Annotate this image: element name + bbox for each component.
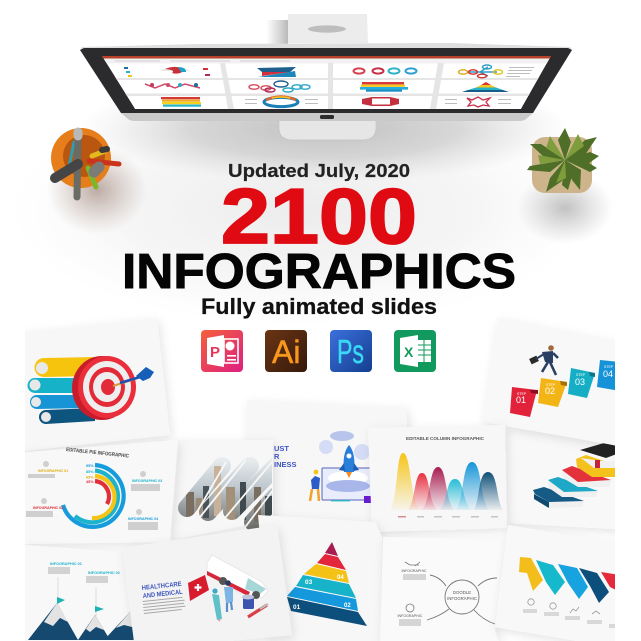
percent labels: 85% <box>86 470 94 474</box>
icon: excel: X <box>404 344 414 360</box>
percent labels: 95% <box>86 464 94 468</box>
screen infographics row 1 <box>124 65 534 78</box>
ribbons <box>519 557 620 603</box>
icon: illustrator <box>265 330 307 372</box>
panel: mountains slide: INFOGRAPHIC 02 <box>88 571 120 575</box>
icon: powerpoint <box>201 330 243 372</box>
infographics: INFOGRAPHICS <box>122 245 516 299</box>
panel: pie infographic slide <box>15 440 178 544</box>
icons row <box>528 599 600 614</box>
step 01: STEP <box>517 392 527 396</box>
app icons <box>201 330 436 372</box>
heading: business: R <box>274 452 280 461</box>
monitor top edge <box>80 43 572 50</box>
headline <box>122 160 516 319</box>
title: EDITABLE PIE INFOGRAPHIC <box>66 447 129 460</box>
businessman <box>529 345 558 375</box>
panel: healthcare slide: AND MEDICAL <box>142 589 183 600</box>
title: EDITABLE COLUMN INFOGRAPHIC <box>406 436 485 441</box>
wide pale backdrop glow <box>10 95 590 325</box>
monitor bezel <box>80 48 572 113</box>
icon: powerpoint: P <box>210 344 220 361</box>
panel: pyramid slide <box>258 515 382 641</box>
step 01: 01 <box>516 395 526 405</box>
plant shadow <box>517 172 613 244</box>
step 04: 04 <box>603 369 613 379</box>
monitor <box>80 14 572 140</box>
pyramid chart: 02 <box>344 603 351 609</box>
monitor screen <box>100 56 555 109</box>
photo: diagonal city strips <box>178 457 272 530</box>
pens <box>55 132 119 197</box>
panel: ribbon arrows slide <box>495 525 630 641</box>
screen grid gaps <box>100 63 555 109</box>
update line: Updated July, 2020 <box>228 160 410 181</box>
panel: rocket business slide <box>247 400 407 525</box>
heading: business: UST <box>274 444 289 453</box>
cup <box>51 128 111 188</box>
step 03: STEP <box>576 373 586 377</box>
pot <box>532 137 592 193</box>
panel: city photo slide <box>170 440 273 540</box>
icon: excel <box>394 330 436 372</box>
dart <box>113 367 154 386</box>
step 04: STEP <box>604 365 614 369</box>
leaves <box>527 128 599 192</box>
slide collage <box>15 318 630 641</box>
potted plant <box>517 128 613 244</box>
percent labels: 65% <box>86 476 94 480</box>
heading: business <box>274 446 296 467</box>
mountains <box>28 603 140 640</box>
target <box>72 356 136 420</box>
pencil cup <box>47 128 147 234</box>
step 02: STEP <box>546 383 556 387</box>
step 01 <box>510 387 538 417</box>
arrows <box>427 575 497 624</box>
callouts: INFOGRAPHIC 04 <box>128 517 158 521</box>
pyramid chart: 04 <box>337 575 344 581</box>
step 03: 03 <box>575 377 585 387</box>
panel: doodle mind map slide: INFOGRAPHIC <box>447 596 477 601</box>
labels: INFOGRAPHIC <box>402 569 427 573</box>
panel: steps slide <box>484 345 615 446</box>
panel: target slide <box>15 318 170 452</box>
flags <box>57 577 104 616</box>
subtitle: Fully animated slides <box>201 294 437 319</box>
callouts: INFOGRAPHIC 03 <box>132 479 162 483</box>
panel: healthcare slide <box>122 525 292 641</box>
callout labels: INFOGRAPHIC 01 <box>50 562 82 566</box>
bucket and syringe <box>242 594 268 617</box>
illustration: book stairs <box>533 443 615 508</box>
panel: column chart slide <box>368 425 507 532</box>
first aid kit <box>188 575 209 601</box>
heading: HEALTHCARE <box>141 581 183 592</box>
body text lines <box>143 597 186 614</box>
panel: mountains slide <box>25 545 140 641</box>
mountain chart <box>390 453 503 510</box>
callouts <box>33 469 162 521</box>
nurse <box>212 588 222 621</box>
apple logo <box>320 115 334 119</box>
icon: photoshop <box>330 330 372 372</box>
doctor <box>224 580 233 612</box>
cup shadow <box>47 146 147 234</box>
percent labels: 45% <box>86 480 94 484</box>
monitor stand foot <box>279 120 376 140</box>
pyramid chart: 01 <box>293 604 301 611</box>
monitor chin <box>121 113 533 121</box>
monitor shadow <box>80 73 570 183</box>
icon: illustrator: Ai <box>272 334 300 370</box>
callouts: INFOGRAPHIC 02 <box>33 506 63 510</box>
step 02: 02 <box>545 386 555 396</box>
panel: doodle mind map slide: DOODLE <box>453 590 471 595</box>
panel: graduation books slide <box>507 443 615 534</box>
pyramid chart: 03 <box>305 579 313 586</box>
illustration: rocket and laptop <box>319 431 372 503</box>
percent labels <box>86 464 94 483</box>
step 02 <box>538 378 567 407</box>
pyramid chart <box>287 542 367 626</box>
ambulance <box>207 555 268 599</box>
step 04 <box>597 360 615 390</box>
2100 count: 2100 <box>221 172 417 260</box>
radial chart <box>63 465 124 527</box>
screen infographics row 3 <box>161 96 511 107</box>
monitor stand top <box>266 14 368 44</box>
option bars <box>28 357 96 424</box>
callouts: INFOGRAPHIC 01 <box>38 469 68 473</box>
panel: doodle mind map slide: INFOGRAPHIC <box>398 614 423 618</box>
center circle <box>445 580 479 614</box>
heading: business: INESS <box>274 460 297 469</box>
panel: doodle mind map slide <box>380 537 508 641</box>
screen infographics row 2 <box>145 81 509 92</box>
person <box>310 470 320 501</box>
icon: photoshop: Ps <box>337 333 364 370</box>
axis labels <box>398 516 498 518</box>
step 03 <box>568 368 595 398</box>
